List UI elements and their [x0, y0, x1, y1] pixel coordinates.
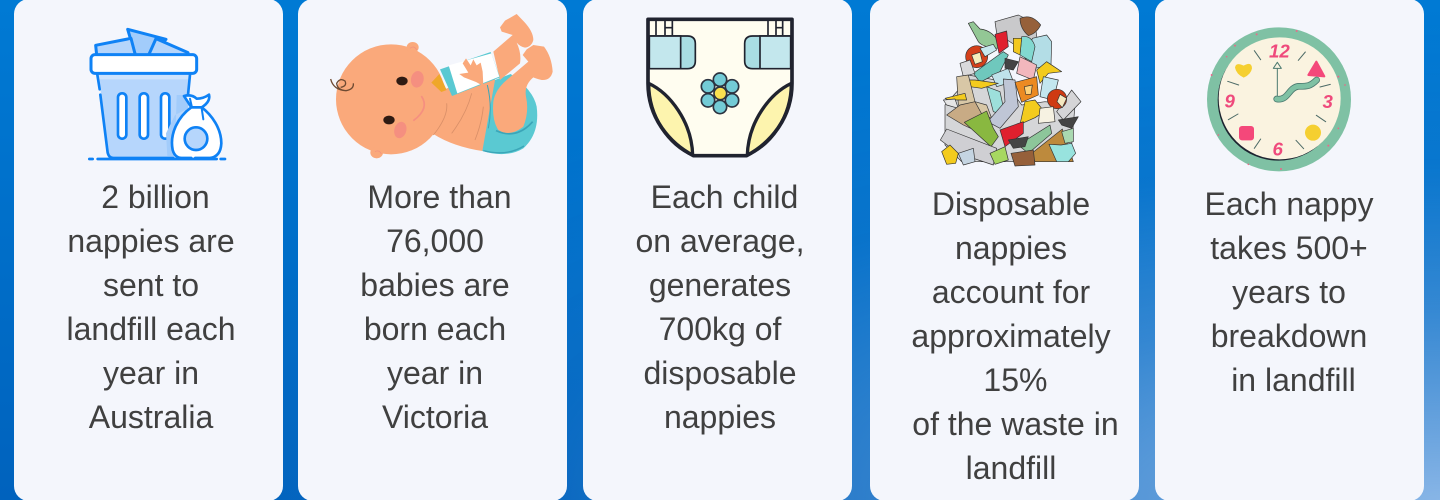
panel: card 3 background [582, 0, 852, 500]
panel: card 5 background [1154, 0, 1424, 500]
icon: rubbish bin with bag [89, 29, 225, 159]
icon: clock [1207, 27, 1351, 171]
text: 15 percent of landfill: Disposable nappies account for approximately 15% of the waste in landfill [903, 186, 1119, 486]
text: 76,000 babies: More than 76,000 babies are born each year in Victoria [360, 179, 511, 435]
icon: nappy with flower [648, 19, 792, 156]
text: 2 billion nappies: 2 billion nappies are sent to landfill each year in Australia [66, 179, 236, 435]
icon: pile of rubbish [940, 15, 1081, 166]
icon: clock: 9 [1224, 90, 1235, 111]
panel: card 4 background [870, 0, 1138, 500]
icon: clock: 3 [1322, 91, 1333, 112]
icon: clock: 6 [1272, 138, 1283, 159]
text: 700kg per child: Each child on average, generates 700kg of disposable nappies [635, 179, 804, 435]
text: 500+ years: Each nappy takes 500+ years to breakdown in landfill [1204, 186, 1374, 398]
panel: card 1 background [14, 0, 282, 500]
icon: baby with bottle [331, 14, 553, 158]
panel: card 2 background [298, 0, 566, 500]
icon: clock: 12 [1269, 40, 1290, 61]
